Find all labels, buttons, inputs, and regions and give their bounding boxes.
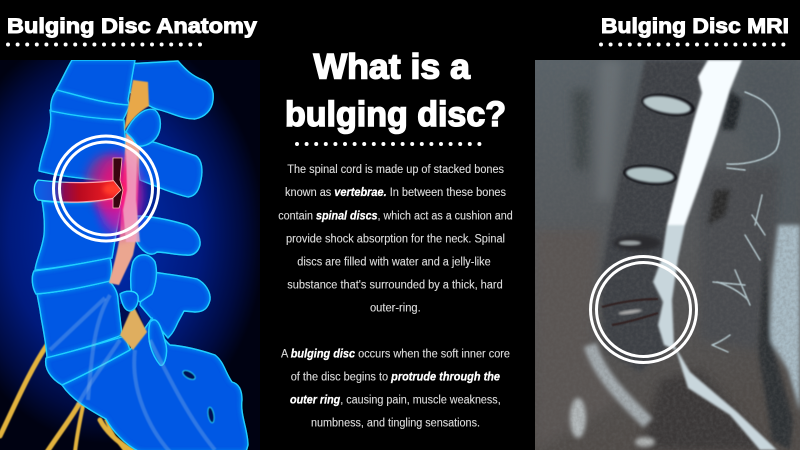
MRI background tissue [535,60,800,450]
highlight rings on anatomy [54,136,158,241]
bright tissue right side [570,225,800,450]
vertebrae bodies [35,60,135,358]
text block: bulging disc explanation [281,349,510,430]
broad soft tissue shading [535,60,800,450]
sacrum [62,318,248,450]
spinal canal white signal [653,60,777,450]
text block: bulging disc explanation: A bulging disc occurs when the soft inner core [281,349,510,361]
panel: bulging disc anatomy illustration [0,60,260,450]
text block: spinal anatomy explanation [278,164,513,315]
transverse processes [126,61,213,338]
text block: spinal anatomy explanation: outer-ring. [370,303,421,315]
text block: spinal anatomy explanation: substance that's surrounded by a thick, hard [287,280,503,292]
text block: spinal anatomy explanation: The spinal cord is made up of stacked bones [287,164,504,176]
text block: bulging disc explanation: of the disc begins to protrude through the [291,372,501,384]
dotted divider under MRI heading [601,42,790,46]
panel: bulging disc MRI scan [535,60,800,450]
dotted divider under title [297,142,489,146]
heading: bulging disc anatomy: Bulging Disc Anatomy [7,14,257,38]
text block: spinal anatomy explanation: discs are filled with water and a jelly-like [297,256,491,268]
dotted divider under anatomy heading [8,42,201,46]
title [285,48,506,134]
yellow spinal nerves [0,345,134,450]
vertebral column dark tissue [600,60,742,372]
glowing bulging disc [34,145,150,245]
intervertebral discs [32,90,130,385]
highlight rings on MRI [590,256,696,362]
title: What is a [314,48,471,86]
facet joints [120,109,167,365]
sacrum foramina [181,368,215,423]
heading: bulging disc MRI: Bulging Disc MRI [601,14,789,38]
translucent nerve roots [50,295,215,450]
spinal cord [109,80,149,350]
bright posterior lines [712,92,779,352]
MRI grain texture [570,62,800,450]
text block: spinal anatomy explanation: provide shock absorption for the neck. Spinal [286,234,505,246]
text block: spinal anatomy explanation: contain spinal discs, which act as a cushion and [278,210,513,222]
text block: spinal anatomy explanation: known as vertebrae. In between these bones [285,187,506,199]
text block: bulging disc explanation: outer ring, causing pain, muscle weakness, [290,395,501,407]
text block: bulging disc explanation: numbness, and tingling sensations. [311,418,480,430]
illustration background [0,60,260,450]
title: bulging disc? [285,95,506,134]
intervertebral discs on MRI [602,90,696,325]
dark canal gaps [119,304,145,348]
